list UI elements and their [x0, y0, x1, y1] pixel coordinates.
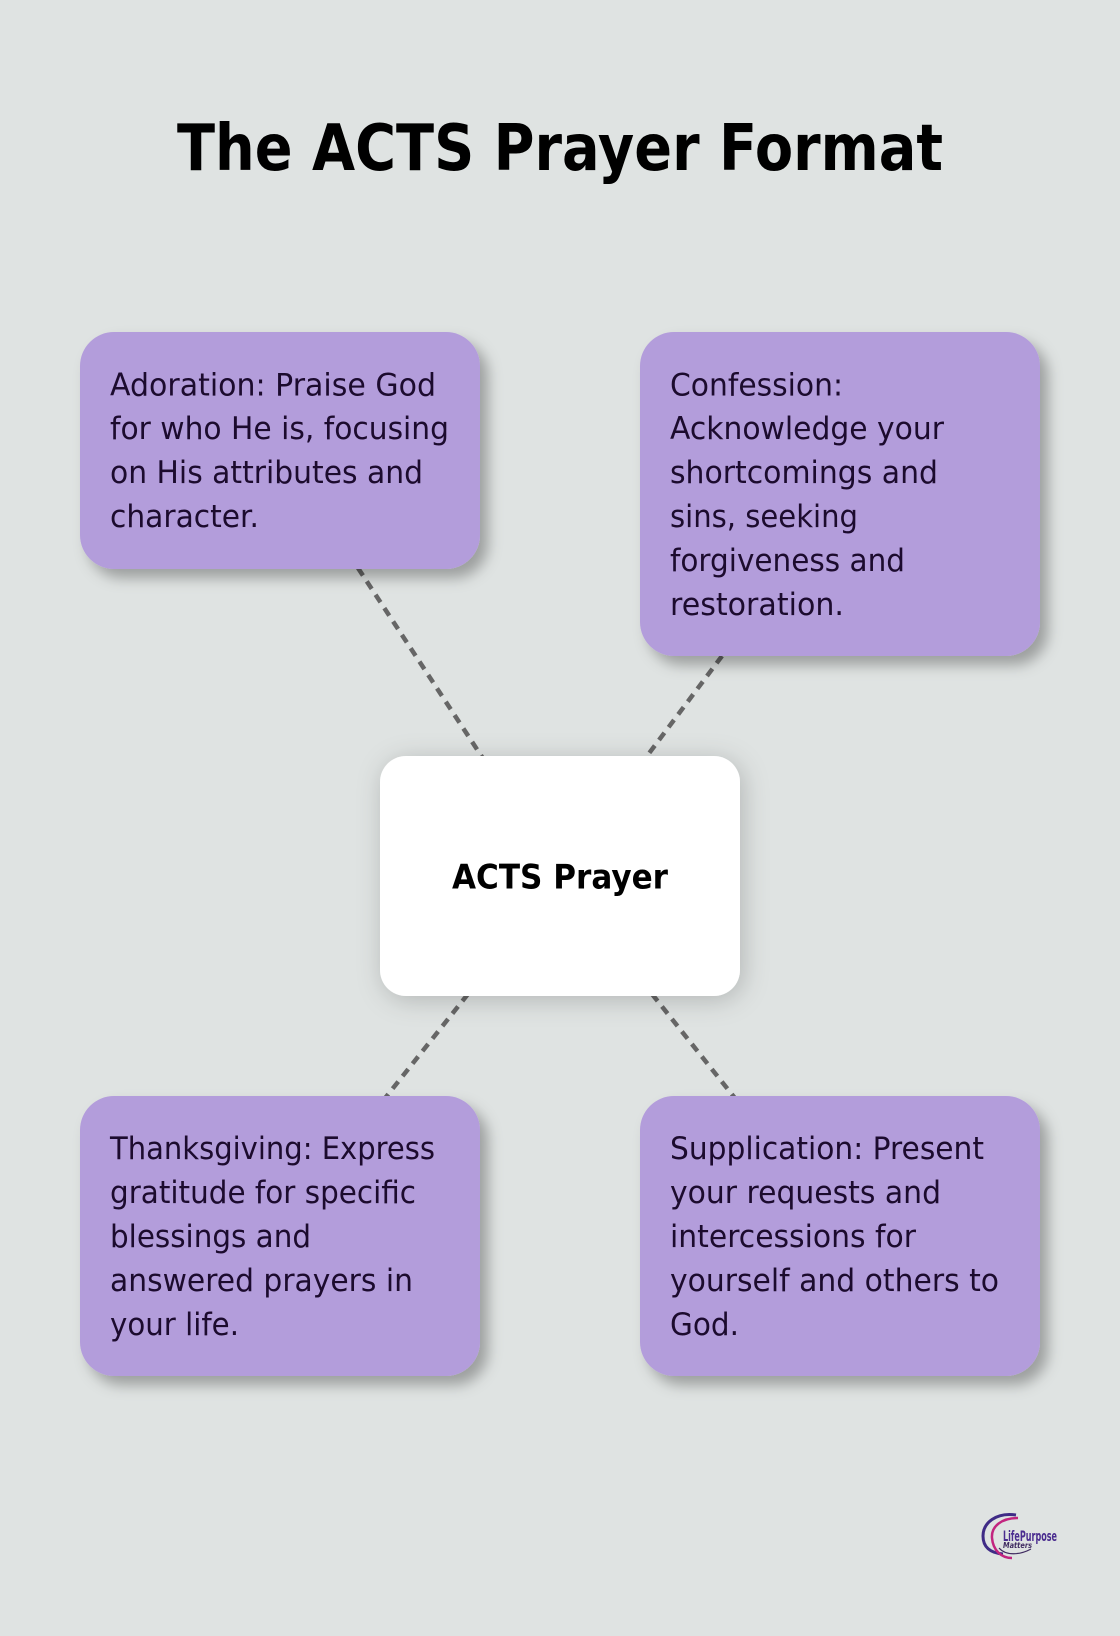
title: The ACTS Prayer Format: [177, 112, 943, 186]
panel: Supplication: [640, 1096, 1040, 1376]
text: Supplication: intercessions for: [670, 1219, 916, 1255]
connector: Confession to center: [644, 656, 722, 760]
text: Confession: Confession:: [670, 368, 843, 404]
text: Confession: forgiveness and: [670, 543, 905, 579]
logo: Life Purpose Matters: LifePurpose: [1003, 1529, 1057, 1545]
text: Confession: restoration.: [670, 587, 844, 623]
text: Adoration: Adoration: Praise God: [110, 368, 436, 404]
logo: Life Purpose Matters: Matters: [1003, 1541, 1032, 1550]
logo: Life Purpose Matters: [983, 1515, 1057, 1558]
center label: ACTS Prayer: [452, 858, 668, 898]
text: Supplication: yourself and others to: [670, 1263, 999, 1299]
text: Adoration: for who He is, focusing: [110, 411, 449, 447]
text: Thanksgiving: Thanksgiving: Express: [109, 1131, 435, 1167]
text: Confession: sins, seeking: [670, 499, 858, 535]
text: Thanksgiving: [109, 1131, 435, 1343]
text: Supplication: Supplication: Present: [670, 1131, 984, 1167]
panel: Adoration: [80, 332, 480, 569]
text: Supplication: your requests and: [670, 1175, 941, 1211]
text: Adoration: on His attributes and: [110, 455, 423, 491]
text: Confession: shortcomings and: [670, 455, 938, 491]
panel: center ACTS Prayer: [380, 756, 740, 996]
text: Thanksgiving: blessings and: [110, 1219, 311, 1255]
text: Supplication: [670, 1131, 999, 1343]
text: Confession: Acknowledge your: [670, 411, 944, 447]
text: Thanksgiving: answered prayers in: [110, 1263, 413, 1299]
text: Thanksgiving: gratitude for specific: [110, 1175, 416, 1211]
connector: Supplication to center: [652, 994, 738, 1102]
text: Supplication: God.: [670, 1307, 739, 1343]
text: Thanksgiving: your life.: [110, 1307, 239, 1343]
panel: Confession: [640, 332, 1040, 656]
text: Adoration: character.: [110, 499, 259, 535]
connector: Adoration to center: [358, 568, 484, 760]
connector: Thanksgiving to center: [382, 994, 468, 1102]
panel: Thanksgiving: [80, 1096, 480, 1376]
text: Confession: [670, 368, 944, 623]
text: Adoration: [110, 368, 449, 535]
